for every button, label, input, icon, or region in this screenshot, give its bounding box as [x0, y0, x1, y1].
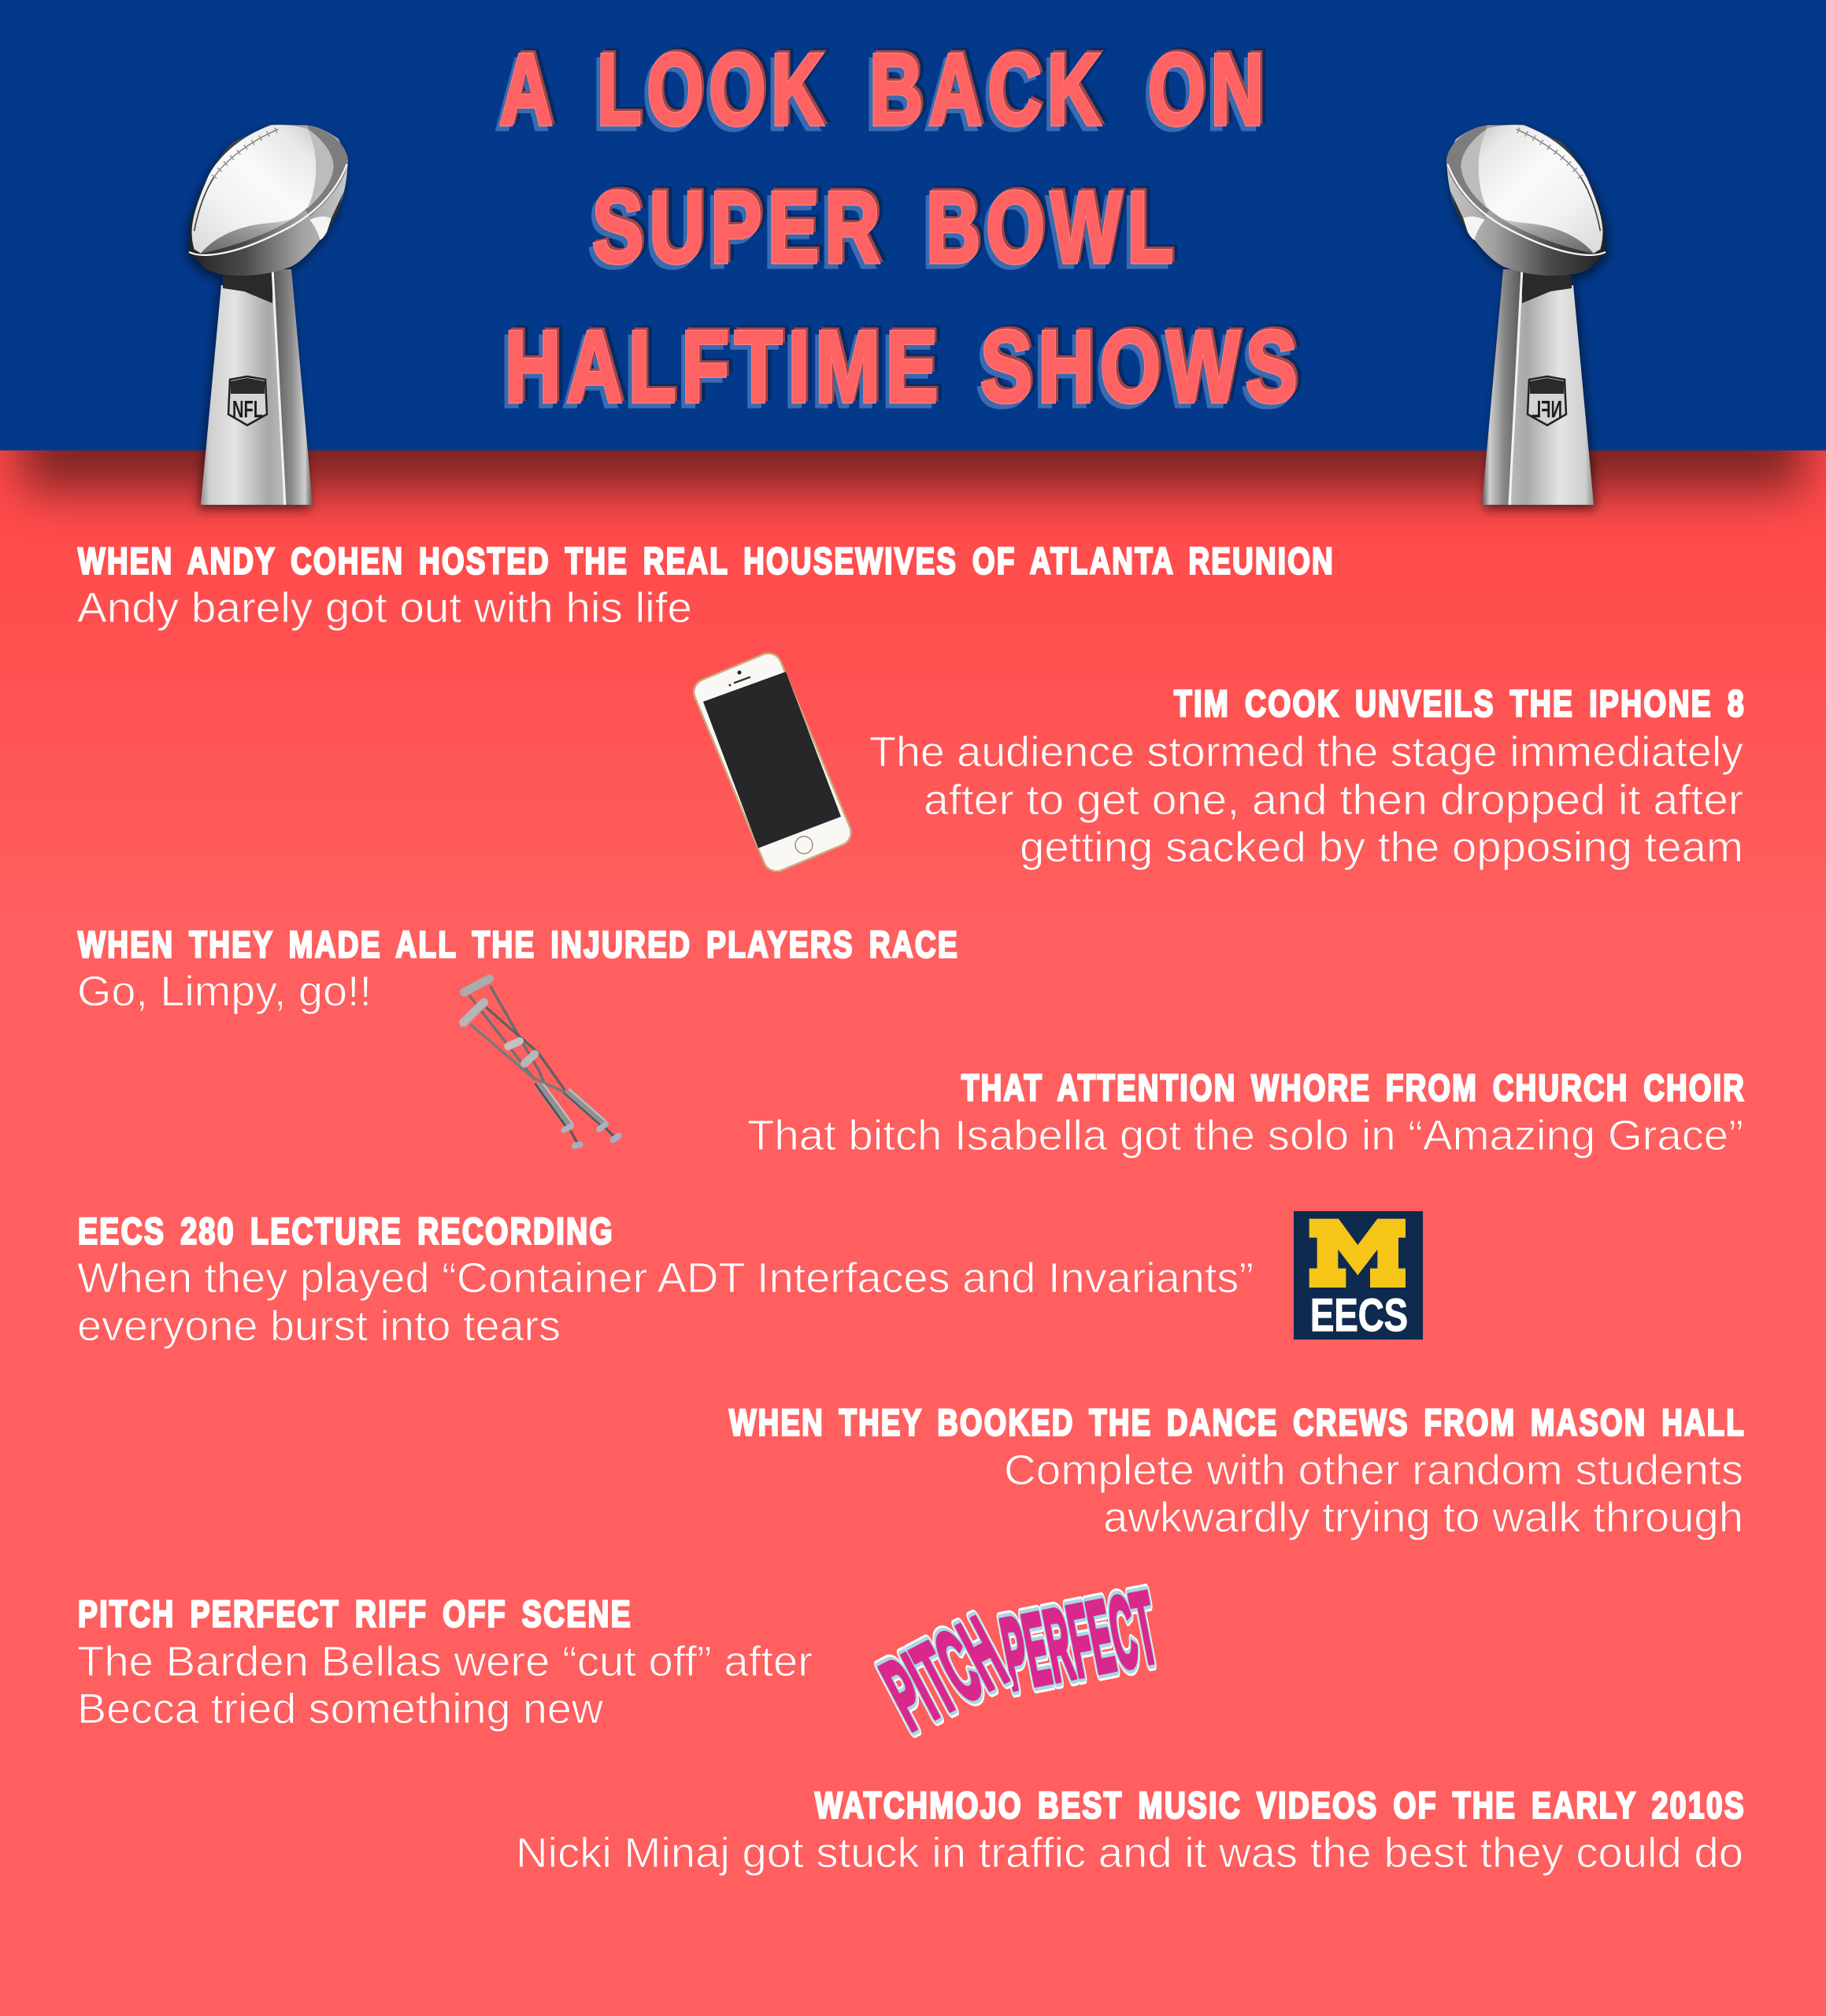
text block: Tim Cook: after to get one, and then dropped it after [924, 776, 1743, 824]
title: A [499, 33, 558, 146]
title: SUPER [598, 167, 891, 280]
title: ON [1150, 31, 1272, 144]
icon: NFL shield left: NFL [232, 395, 263, 423]
icon: Pitch Perfect logo: PITCH [866, 1596, 1021, 1751]
title: SUPER [594, 169, 888, 282]
title: ON [1148, 33, 1269, 146]
text block: Pitch Perfect: Becca tried something new [77, 1685, 604, 1732]
title: LOOK [599, 31, 832, 144]
title: ON [1148, 33, 1269, 146]
title: BACK [875, 29, 1112, 143]
text block: EECS 280: everyone burst into tears [77, 1303, 561, 1350]
title: LOOK [593, 38, 825, 151]
text block: Pitch Perfect: The Barden Bellas were “cut off” after [77, 1638, 813, 1685]
title: BOWL [926, 171, 1179, 284]
text block: Andy Cohen: WHEN ANDY COHEN HOSTED THE REAL HOUSEWIVES OF ATLANTA REUNION [78, 540, 1335, 581]
text block: EECS 280 [77, 1210, 1254, 1350]
text block: church choir [747, 1066, 1746, 1159]
icon: NFL shield right: NFL [1532, 395, 1562, 423]
text block: Mason Hall: Complete with other random students [1004, 1447, 1743, 1494]
title: SHOWS [983, 308, 1306, 421]
text: PERFECT [993, 1569, 1165, 1711]
text block: church choir: That bitch Isabella got the solo in “Amazing Grace” [747, 1112, 1743, 1159]
title: SHOWS [986, 306, 1309, 420]
title: HALFTIME [507, 308, 946, 421]
icon: crutches [463, 979, 619, 1146]
icon: Michigan EECS logo: EECS [1310, 1290, 1408, 1341]
text: PERFECT [993, 1569, 1165, 1711]
panel: blue header [0, 0, 1826, 450]
icon: iPhone [690, 649, 855, 876]
icon: NFL shield right [1528, 376, 1566, 425]
text block: EECS 280: When they played “Container ADT Interfaces and Invariants” [77, 1254, 1254, 1302]
panel: red background [0, 450, 1826, 2016]
text block: injured players: Go, Limpy, go!! [77, 968, 372, 1015]
title: BOWL [922, 176, 1175, 289]
icon: Pitch Perfect logo: PITCH [866, 1596, 1021, 1751]
text block: WatchMojo [516, 1784, 1746, 1877]
title: SUPER [592, 171, 886, 284]
title: A [495, 38, 554, 151]
icon: left trophy [189, 124, 348, 505]
title: HALFTIME [501, 315, 939, 428]
title [495, 29, 1309, 428]
title: HALFTIME [510, 306, 949, 420]
title: BOWL [932, 167, 1184, 280]
text block: Pitch Perfect: PITCH PERFECT RIFF OFF SCENE [78, 1592, 632, 1635]
title: A [505, 29, 564, 143]
title: SHOWS [980, 310, 1303, 424]
icon: Pitch Perfect logo [866, 1569, 1165, 1751]
text: PERFECT [993, 1569, 1165, 1711]
title: SUPER [588, 176, 882, 289]
text block: Andy Cohen [77, 540, 1335, 632]
icon: NFL shield left [228, 376, 267, 425]
text block: Pitch Perfect [77, 1592, 813, 1732]
title: HALFTIME [505, 310, 943, 424]
title: BOWL [928, 169, 1181, 282]
title: A [499, 33, 558, 146]
title: BACK [869, 33, 1106, 146]
title: ON [1154, 29, 1275, 143]
title: BACK [865, 38, 1102, 151]
title: A [502, 31, 561, 144]
text block: Tim Cook: The audience stormed the stage immediately [869, 728, 1743, 776]
text block: Tim Cook [869, 682, 1746, 871]
title: BACK [869, 33, 1106, 146]
text block: injured players: WHEN THEY MADE ALL THE INJURED PLAYERS RACE [78, 923, 959, 965]
icon: Pitch Perfect logo: PITCH [866, 1596, 1021, 1751]
text block: Mason Hall [729, 1402, 1746, 1541]
title: ON [1144, 38, 1265, 151]
title: LOOK [597, 33, 829, 146]
title: SUPER [592, 171, 886, 284]
text block: Andy Cohen: Andy barely got out with his life [77, 584, 692, 632]
icon: right trophy [1446, 124, 1606, 505]
icon: Michigan EECS logo [1294, 1211, 1423, 1341]
title: BACK [872, 31, 1109, 144]
title: SHOWS [980, 310, 1303, 424]
text block: EECS 280: EECS 280 LECTURE RECORDING [78, 1210, 614, 1252]
text block: injured players [77, 923, 959, 1015]
title: LOOK [597, 33, 829, 146]
title: BOWL [926, 171, 1179, 284]
text block: Tim Cook: getting sacked by the opposing team [1020, 824, 1743, 871]
text block: WatchMojo: Nicki Minaj got stuck in traffic and it was the best they could do [516, 1829, 1743, 1877]
text block: Mason Hall: awkwardly trying to walk through [1103, 1494, 1743, 1541]
title: LOOK [602, 29, 835, 143]
title: SHOWS [976, 315, 1299, 428]
title: HALFTIME [505, 310, 943, 424]
